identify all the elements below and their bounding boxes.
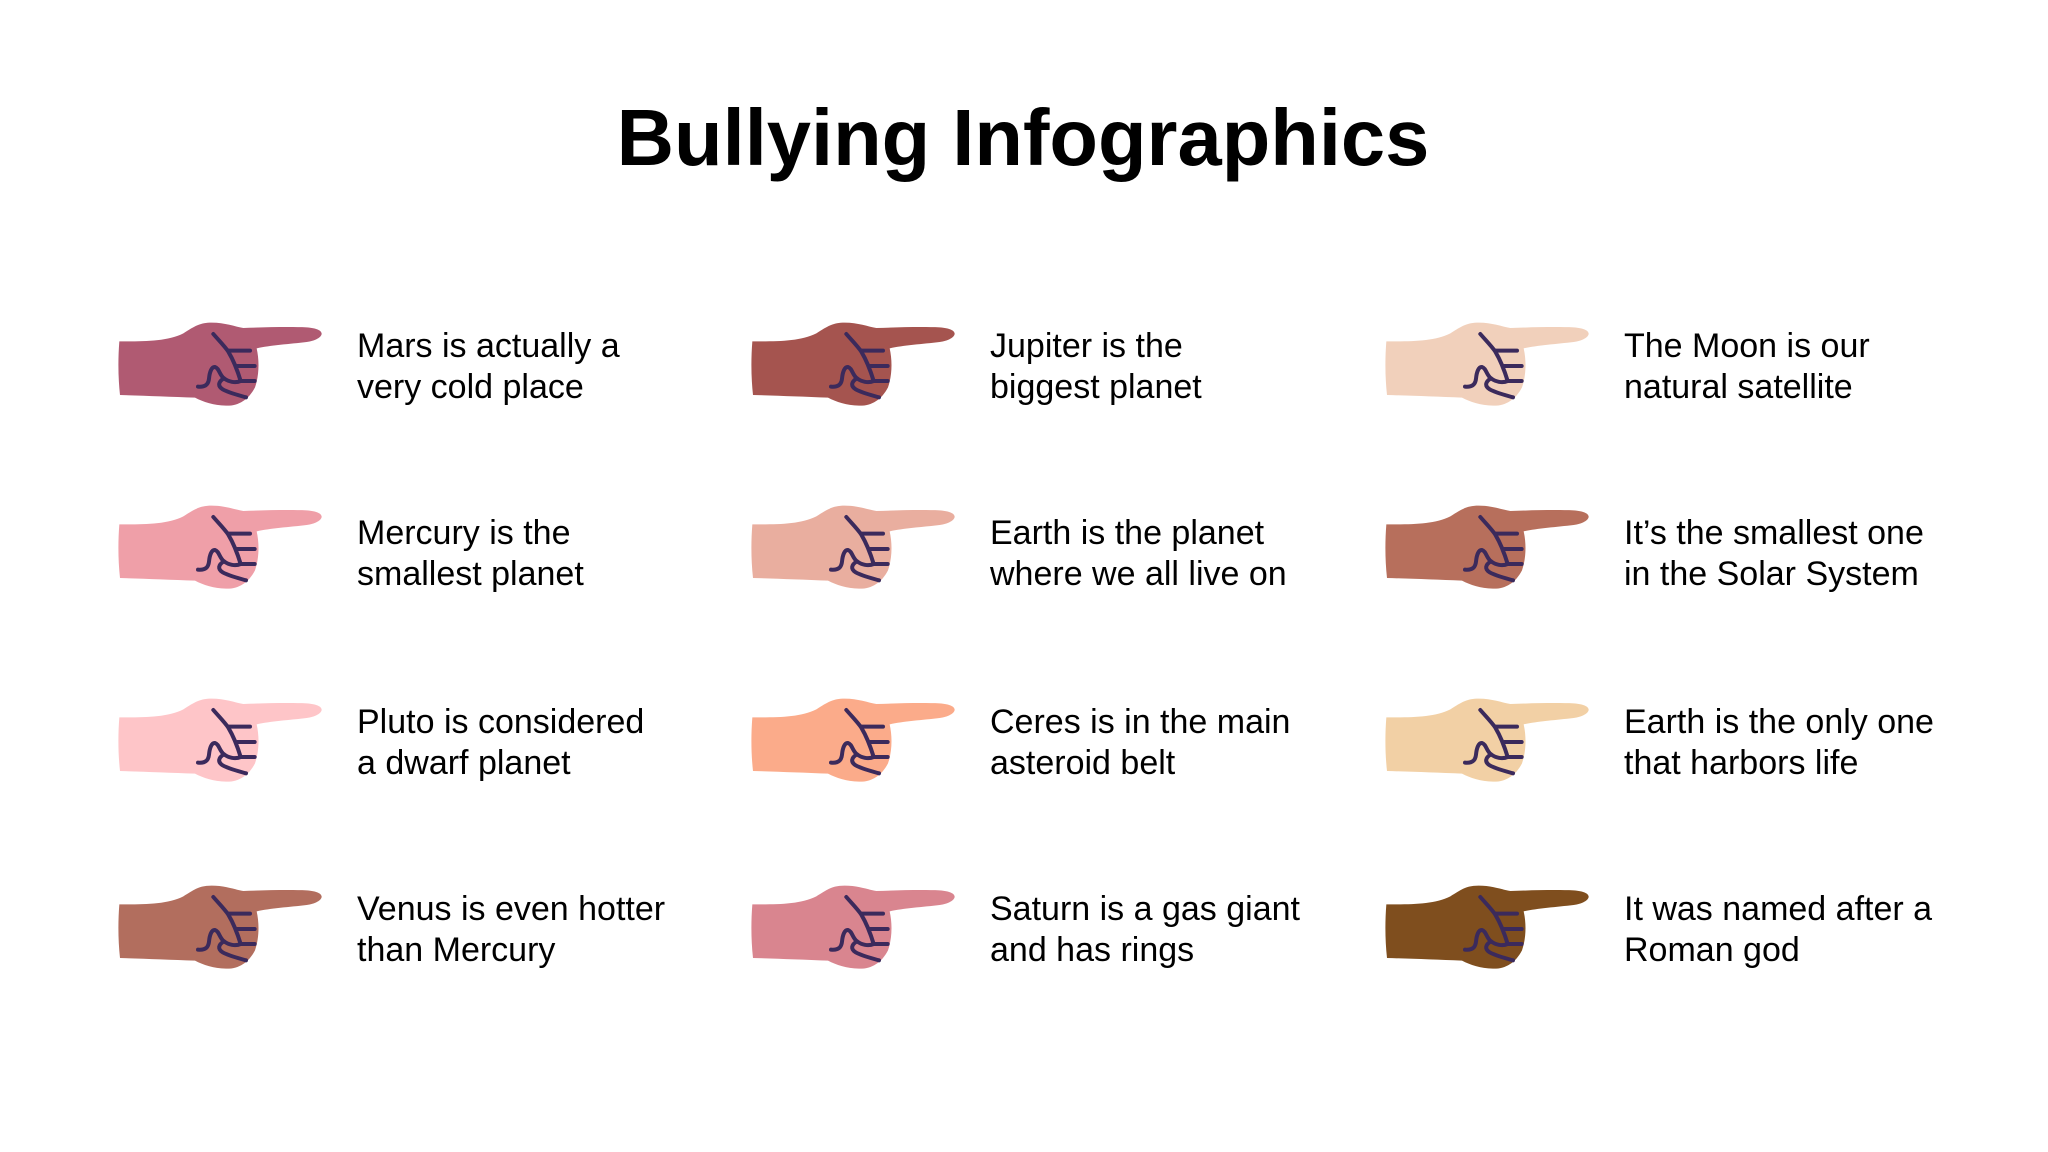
text: Venus <box>357 890 665 969</box>
panel: Mercury <box>118 506 584 593</box>
text: Jupiter <box>990 327 1202 406</box>
panel: Smallest <box>1385 506 1924 593</box>
icon: pointing hand <box>1385 506 1589 589</box>
icon: pointing hand <box>118 698 322 782</box>
panel: Moon <box>1385 322 1870 406</box>
panel: Saturn <box>751 886 1300 969</box>
text: Moon <box>1624 327 1870 406</box>
panel: Mars <box>118 322 620 406</box>
icon: pointing hand <box>1385 322 1589 406</box>
icon: pointing hand <box>118 322 322 406</box>
icon: pointing hand <box>751 506 955 589</box>
text: Life: Earth is the only one <box>1624 703 1934 741</box>
panel: Ceres <box>751 698 1290 782</box>
text: Mars <box>357 327 620 406</box>
icon: pointing hand <box>1385 886 1589 969</box>
text: Roman god: Roman god <box>1624 931 1800 969</box>
text: Jupiter: biggest planet <box>990 368 1202 406</box>
panel: Jupiter <box>751 322 1202 406</box>
panel: Life <box>1385 698 1934 782</box>
text: Life <box>1624 703 1934 782</box>
icon: pointing hand <box>751 886 955 969</box>
text: Mercury: Mercury is the <box>357 514 570 552</box>
text: Mercury <box>357 514 584 593</box>
text: Moon: natural satellite <box>1624 368 1853 406</box>
text: Jupiter: Jupiter is the <box>990 327 1183 365</box>
text: Pluto: Pluto is considered <box>357 703 644 741</box>
text: Venus: Venus is even hotter <box>357 890 665 928</box>
text: Mercury: smallest planet <box>357 555 584 593</box>
text: Ceres <box>990 703 1290 782</box>
icon: pointing hand <box>118 886 322 969</box>
text: Venus: than Mercury <box>357 931 555 969</box>
icon: pointing hand <box>118 506 322 589</box>
text: Earth <box>990 514 1287 593</box>
panel: Venus <box>118 886 665 969</box>
text: Smallest <box>1624 514 1924 593</box>
title: Bullying Infographics <box>617 93 1429 182</box>
text: Mars: very cold place <box>357 368 584 406</box>
panel: Roman god <box>1385 886 1932 969</box>
text: Saturn <box>990 890 1300 969</box>
text: Earth: where we all live on <box>990 555 1287 593</box>
text: Smallest: It’s the smallest one <box>1624 514 1924 552</box>
icon: pointing hand <box>751 698 955 782</box>
text: Moon: The Moon is our <box>1624 327 1870 365</box>
panel: Pluto <box>118 698 644 782</box>
text: Life: that harbors life <box>1624 744 1858 782</box>
text: Pluto <box>357 703 644 782</box>
text: Ceres: Ceres is in the main <box>990 703 1290 741</box>
text: Roman god: It was named after a <box>1624 890 1932 928</box>
text: Pluto: a dwarf planet <box>357 744 571 782</box>
text: Mars: Mars is actually a <box>357 327 620 365</box>
text: Earth: Earth is the planet <box>990 514 1264 552</box>
icon: pointing hand <box>1385 698 1589 782</box>
text: Saturn: Saturn is a gas giant <box>990 890 1300 928</box>
text: Ceres: asteroid belt <box>990 744 1175 782</box>
text: Saturn: and has rings <box>990 931 1194 969</box>
panel: Earth <box>751 506 1287 593</box>
text: Smallest: in the Solar System <box>1624 555 1919 593</box>
icon: pointing hand <box>751 322 955 406</box>
text: Roman god <box>1624 890 1932 969</box>
